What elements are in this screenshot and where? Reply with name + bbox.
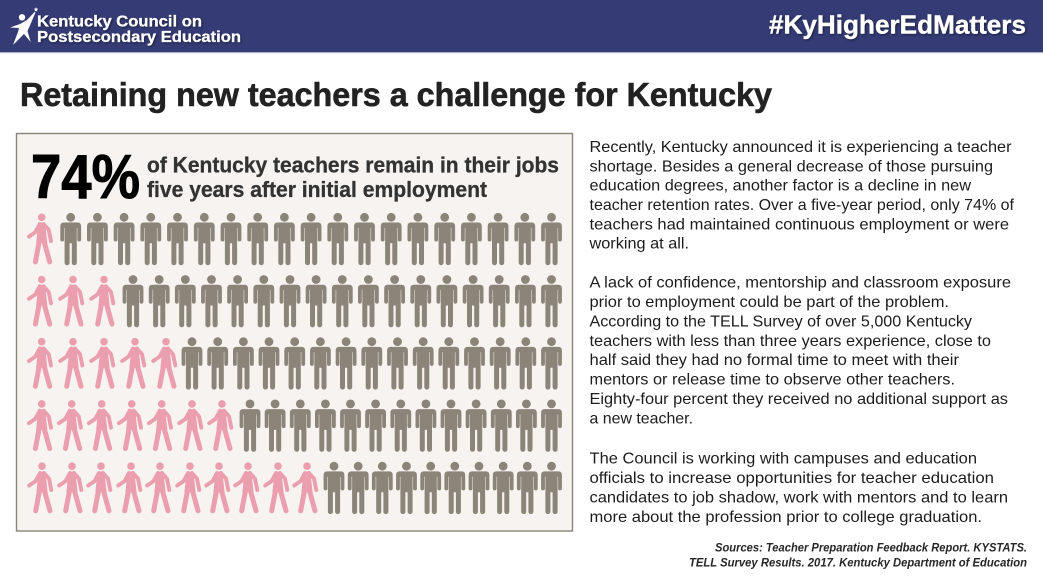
stat description: five years after initial employment <box>147 177 488 202</box>
paragraph 3: The Council is working with campuses and education <box>590 451 977 468</box>
paragraph 1: education degrees, another factor is a decline in new <box>590 178 971 195</box>
paragraph 2 <box>590 275 1011 428</box>
paragraph 1: teachers had maintained continuous employment or were <box>590 216 1009 233</box>
pictogram row 4 <box>29 400 562 452</box>
paragraph 3 <box>590 451 1008 526</box>
header band <box>0 0 1043 53</box>
logo wordmark: Kentucky Council on <box>37 14 202 31</box>
paragraph 2: a new teacher. <box>590 410 693 428</box>
pictogram row 2 <box>29 275 562 327</box>
paragraph 2: half said they had no formal time to meet with their <box>590 352 960 369</box>
stat description: of Kentucky teachers remain in their jobs <box>147 153 559 178</box>
paragraph 2: prior to employment could be part of the problem. <box>590 294 949 311</box>
paragraph 2: A lack of confidence, mentorship and classroom exposure <box>590 275 1011 292</box>
pictogram row 3 <box>29 337 562 390</box>
paragraph 2: Eighty-four percent they received no additional support as <box>590 391 1008 408</box>
paragraph 3: more about the profession prior to college graduation. <box>590 509 982 526</box>
paragraph 1: working at all. <box>588 236 689 253</box>
paragraph 3: officials to increase opportunities for teacher education <box>590 470 994 487</box>
pictogram row 5 <box>29 462 562 514</box>
paragraph 1 <box>588 139 1015 253</box>
paragraph 2: According to the TELL Survey of over 5,000 Kentucky <box>590 314 972 330</box>
pictogram row 1 <box>29 213 562 265</box>
sources <box>689 540 1027 570</box>
title: Retaining new teachers a challenge for Kentucky <box>20 76 773 113</box>
panel: teacher retention pictogram <box>16 134 572 531</box>
big stat 74%: 74% <box>31 143 140 212</box>
hashtag: #KyHigherEdMatters <box>769 10 1026 40</box>
logo wordmark <box>37 14 241 46</box>
icon: star figure logo <box>10 7 38 45</box>
paragraph 1: shortage. Besides a general decrease of those pursuing <box>590 158 993 175</box>
stat description <box>147 153 559 202</box>
logo wordmark: Postsecondary Education <box>37 29 241 46</box>
paragraph 1: teacher retention rates. Over a five-year period, only 74% of <box>590 197 1015 214</box>
sources: TELL Survey Results. 2017. Kentucky Department of Education <box>689 556 1027 570</box>
paragraph 2: mentors or release time to observe other teachers. <box>590 372 955 389</box>
paragraph 1: Recently, Kentucky announced it is experiencing a teacher <box>590 139 1012 156</box>
sources: Sources: Teacher Preparation Feedback Report. KYSTATS. <box>715 540 1027 554</box>
paragraph 2: teachers with less than three years experience, close to <box>590 333 991 350</box>
paragraph 3: candidates to job shadow, work with mentors and to learn <box>590 490 1008 506</box>
